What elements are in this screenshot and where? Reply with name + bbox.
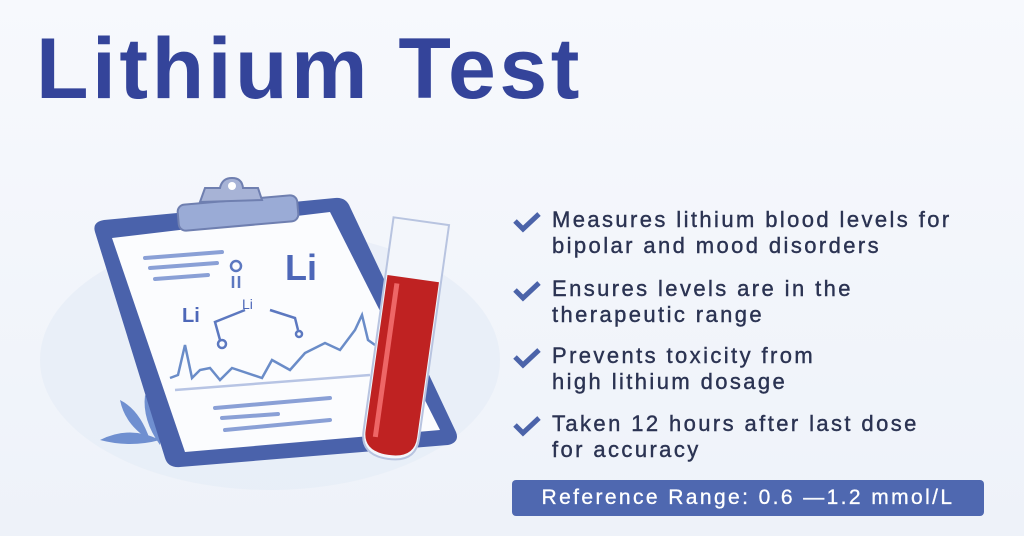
- bullet 4: for accuracy: [552, 437, 701, 462]
- clip: [177, 195, 299, 231]
- bullet 2: therapeutic range: [552, 302, 764, 327]
- bullet 1: bipolar and mood disorders: [552, 233, 881, 258]
- reference range box: [512, 480, 984, 516]
- bullet 2: [513, 276, 853, 327]
- clipboard: Li: [285, 247, 317, 288]
- reference range box: Reference Range: 0.6 —1.2 mmol/L: [542, 486, 954, 509]
- bullet 3: [513, 343, 815, 394]
- bullet 1: Measures lithium blood levels for: [552, 207, 952, 232]
- title: Lithium Test: [36, 21, 583, 117]
- clipboard: Li: [182, 305, 200, 327]
- clipboard: Li: [242, 296, 253, 312]
- bullet 4: [513, 411, 919, 462]
- blood tube: [360, 217, 449, 463]
- bullet 1: [513, 207, 952, 258]
- clipboard: [94, 178, 457, 467]
- icon: leaves: [100, 395, 161, 445]
- bullet 3: high lithium dosage: [552, 369, 787, 394]
- bullet 2: Ensures levels are in the: [552, 276, 853, 301]
- bullet 4: Taken 12 hours after last dose: [552, 411, 919, 436]
- bullet 3: Prevents toxicity from: [552, 343, 815, 368]
- illustration: clipboard and tube: [42, 177, 499, 468]
